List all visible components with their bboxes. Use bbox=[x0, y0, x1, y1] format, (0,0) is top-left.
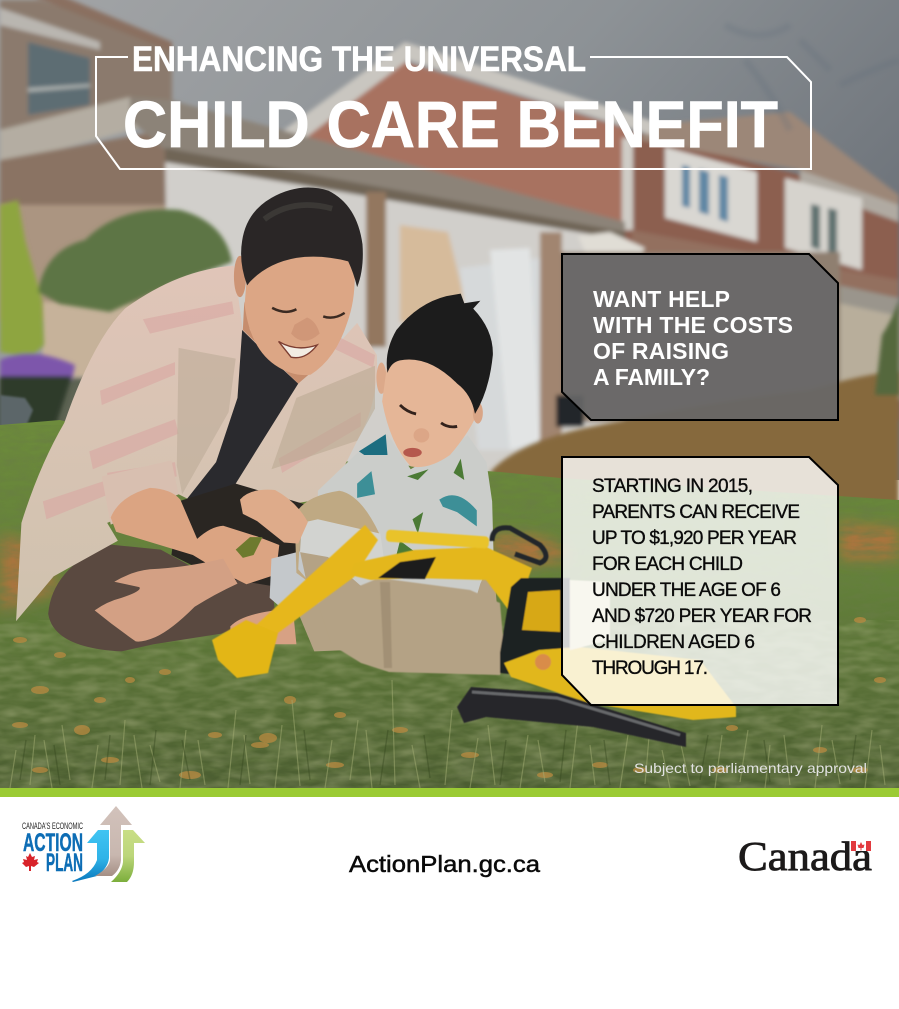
grass tuft in hand bbox=[236, 537, 262, 558]
right fascia bbox=[800, 170, 899, 222]
question text: A FAMILY? bbox=[593, 364, 710, 390]
father: neck bbox=[243, 301, 323, 384]
green divider bar bbox=[0, 788, 899, 797]
boy: right ear bbox=[473, 402, 483, 424]
excavator: bucket bbox=[212, 620, 278, 678]
excavator: handle bbox=[492, 528, 546, 563]
logo text: Action: ACTION bbox=[23, 829, 83, 857]
house background bbox=[0, 0, 899, 480]
excavator: body bbox=[504, 647, 736, 720]
title line one: ENHANCING THE UNIVERSAL bbox=[132, 40, 586, 79]
dark under eave bbox=[0, 376, 82, 422]
boy: face bbox=[382, 358, 479, 467]
question text: WITH THE COSTS bbox=[593, 312, 793, 338]
boy: printed hoodie bbox=[318, 434, 494, 601]
father: trousers bbox=[48, 544, 275, 651]
details text: UP TO $1,920 PER YEAR bbox=[592, 528, 797, 549]
excavator: cab frame bbox=[500, 578, 570, 680]
father: eyes bbox=[272, 308, 345, 318]
logo arrow: blue bbox=[72, 830, 109, 882]
dark gap behind the hands bbox=[171, 484, 307, 587]
plywood board bbox=[398, 224, 465, 324]
logo: Canada's Economic Action Plan bbox=[22, 806, 145, 882]
main lower roof band bbox=[130, 97, 625, 236]
green shrub bbox=[38, 209, 232, 312]
details text: STARTING IN 2015, bbox=[592, 476, 753, 497]
question text: OF RAISING bbox=[593, 338, 729, 364]
boy: sleeve bbox=[300, 519, 386, 571]
logo icon: maple leaf bbox=[22, 853, 39, 871]
father: hair highlight bbox=[264, 205, 332, 219]
boy: eyes bbox=[400, 405, 457, 427]
website address: ActionPlan.gc.ca bbox=[349, 851, 541, 877]
question text: WANT HELP bbox=[593, 286, 730, 312]
dark grass blades bbox=[20, 730, 856, 785]
father: plaid shirt bbox=[16, 266, 377, 621]
autumn leaf strips bbox=[0, 520, 899, 612]
title block bbox=[96, 40, 811, 169]
sky bbox=[0, 0, 899, 480]
placket shade bbox=[177, 348, 236, 494]
excavator: badge bbox=[535, 654, 551, 670]
dark bush bbox=[0, 376, 72, 428]
flag bbox=[851, 841, 871, 851]
right siding bbox=[562, 252, 840, 422]
boy: trousers bbox=[318, 578, 505, 675]
details text: CHILDREN AGED 6 bbox=[592, 632, 755, 653]
excavator: cylinder bbox=[386, 529, 489, 549]
Canada wordmark bbox=[738, 833, 872, 879]
boy: upper hand bbox=[240, 490, 308, 544]
tree branches bbox=[779, 112, 791, 130]
excavator and trousers bbox=[212, 525, 736, 747]
boy: nose shade bbox=[414, 428, 429, 442]
dinosaur prints bbox=[357, 471, 477, 526]
track tread highlight bbox=[472, 692, 680, 735]
left fascia bbox=[0, 8, 100, 50]
details text: AND $720 PER YEAR FOR bbox=[592, 606, 812, 627]
left eave bbox=[0, 96, 138, 160]
right shrub bbox=[875, 300, 899, 395]
hoodie base bbox=[318, 434, 494, 601]
fallen leaves bbox=[12, 617, 886, 779]
logo text: Plan: PLAN bbox=[46, 849, 83, 877]
right wing brick bbox=[625, 130, 899, 420]
father: face bbox=[245, 253, 355, 375]
excavator: stick bbox=[253, 525, 378, 640]
question text bbox=[593, 286, 793, 390]
boy: jacket hem by knee bbox=[270, 551, 311, 609]
right dormer roof bbox=[640, 112, 899, 215]
lawn texture bbox=[0, 425, 899, 788]
details text: UNDER THE AGE OF 6 bbox=[592, 580, 781, 601]
boy: mouth bbox=[403, 448, 422, 457]
father: hair bbox=[241, 188, 363, 287]
shirt pink checks bbox=[43, 301, 375, 519]
panel: benefit details bbox=[562, 457, 838, 705]
white awning bbox=[578, 232, 645, 256]
lower siding right bbox=[838, 295, 899, 400]
wall below shrub bbox=[40, 300, 134, 380]
shrubs bbox=[0, 200, 899, 428]
logo arrow: tan bbox=[95, 806, 132, 876]
father: upper forearm and cupped hand bbox=[111, 488, 279, 584]
left house upper wall bbox=[0, 0, 172, 135]
gable fascia bbox=[284, 42, 655, 142]
boy: knee bbox=[295, 491, 379, 584]
left roof edge bbox=[30, 0, 172, 52]
details text: FOR EACH CHILD bbox=[592, 554, 743, 575]
father: nose shade bbox=[291, 317, 320, 341]
hood lining bbox=[359, 434, 387, 455]
ladder and door bbox=[460, 258, 540, 450]
window two bbox=[785, 178, 862, 270]
window one bbox=[665, 147, 757, 242]
sleeve cuff bbox=[102, 460, 179, 525]
logo arrow: green bbox=[111, 830, 145, 882]
white corner trim bbox=[622, 138, 633, 230]
left window bbox=[28, 42, 90, 115]
excavator: boom bbox=[350, 547, 532, 612]
garage pillar bbox=[366, 192, 386, 347]
title line two: CHILD CARE BENEFIT bbox=[123, 87, 778, 161]
title frame bbox=[96, 57, 811, 169]
details text: PARENTS CAN RECEIVE bbox=[592, 502, 800, 523]
subject to approval note: Subject to parliamentary approval bbox=[634, 760, 867, 776]
excavator: black panel bbox=[378, 557, 436, 579]
details panel shape bbox=[562, 457, 838, 705]
right pillar bbox=[540, 232, 562, 457]
excavator: cab window bbox=[522, 590, 560, 632]
gable brick bbox=[300, 62, 625, 225]
grass blades bbox=[10, 680, 885, 788]
yellow shrub bbox=[0, 200, 44, 358]
pale grass noise bbox=[0, 620, 899, 788]
figures scaled from detail coordinates bbox=[16, 188, 500, 651]
excavator: tracks bbox=[457, 687, 686, 747]
excavator: cab interior under panel bbox=[570, 580, 610, 650]
details text bbox=[592, 476, 812, 679]
purple flowers bbox=[0, 354, 75, 380]
garage wall bbox=[165, 148, 625, 480]
wheelie bin bbox=[0, 395, 33, 429]
right chest shade bbox=[271, 366, 375, 469]
mound of leaves bbox=[490, 372, 899, 510]
lower brick below windows bbox=[632, 230, 899, 300]
question panel shape bbox=[562, 254, 838, 420]
boy: hair bbox=[387, 294, 493, 414]
left brick wall lower bbox=[0, 132, 168, 208]
dark opening bbox=[556, 395, 584, 427]
wordmark text: Canada bbox=[738, 833, 872, 879]
father: smile bbox=[279, 341, 317, 358]
logo text: Canada's Economic: CANADA'S ECONOMIC bbox=[22, 821, 83, 831]
father: dark t-shirt bbox=[182, 330, 298, 525]
photo: father and son playing on the lawn bbox=[0, 0, 899, 788]
father: ear bbox=[234, 256, 246, 297]
panel: question bbox=[562, 254, 838, 420]
father: lower hand and forearm bbox=[95, 559, 237, 642]
shirt base bbox=[16, 266, 377, 621]
dark grass noise bbox=[0, 425, 899, 788]
lawn bbox=[0, 420, 899, 788]
boy: lower body backing bbox=[296, 537, 500, 651]
trouser shade bbox=[380, 582, 392, 668]
details text: THROUGH 17. bbox=[592, 658, 708, 679]
boy: lower hand bbox=[230, 609, 296, 646]
boy: left ear bbox=[376, 362, 386, 394]
